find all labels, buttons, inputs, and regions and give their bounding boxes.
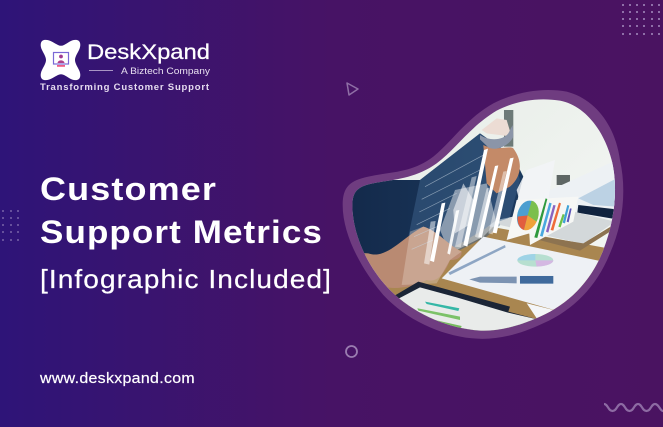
logo	[40, 40, 211, 93]
decorative dots: left	[2, 210, 19, 241]
photo: arm and wrist	[483, 145, 520, 193]
decorative dots: top right	[622, 4, 660, 35]
icon: small circle	[346, 346, 357, 357]
logo subtitle: A Biztech Company	[121, 66, 211, 76]
photo: shirt	[340, 133, 523, 255]
heading line 3: [Infographic Included]	[40, 264, 332, 294]
photo: hologram lines	[412, 153, 487, 249]
photo: holographic bars	[424, 149, 514, 265]
blob border	[343, 90, 623, 339]
heading	[40, 171, 332, 294]
photo: wall	[352, 99, 615, 331]
photo blob	[340, 90, 630, 350]
website url: www.deskxpand.com	[39, 371, 195, 387]
icon: wave	[604, 404, 663, 411]
photo: paper report	[442, 237, 603, 312]
tagline: Transforming Customer Support	[40, 82, 210, 93]
photo: desk	[386, 226, 604, 331]
heading line 2: Support Metrics	[40, 214, 323, 250]
photo: notebook	[499, 212, 612, 244]
photo	[352, 99, 616, 331]
photo: keyboard and laptop	[562, 162, 615, 220]
logo divider	[89, 70, 113, 71]
photo: pen	[469, 277, 517, 283]
icon: triangle outline	[347, 83, 358, 95]
icon: logo badge	[41, 40, 80, 80]
brand name: DeskXpand	[87, 41, 210, 64]
photo: floating chart cards	[516, 165, 544, 197]
photo: hand	[353, 227, 462, 288]
photo: hologram panel	[408, 133, 520, 250]
photo: tablet	[396, 282, 536, 331]
heading line 1: Customer	[40, 171, 217, 207]
